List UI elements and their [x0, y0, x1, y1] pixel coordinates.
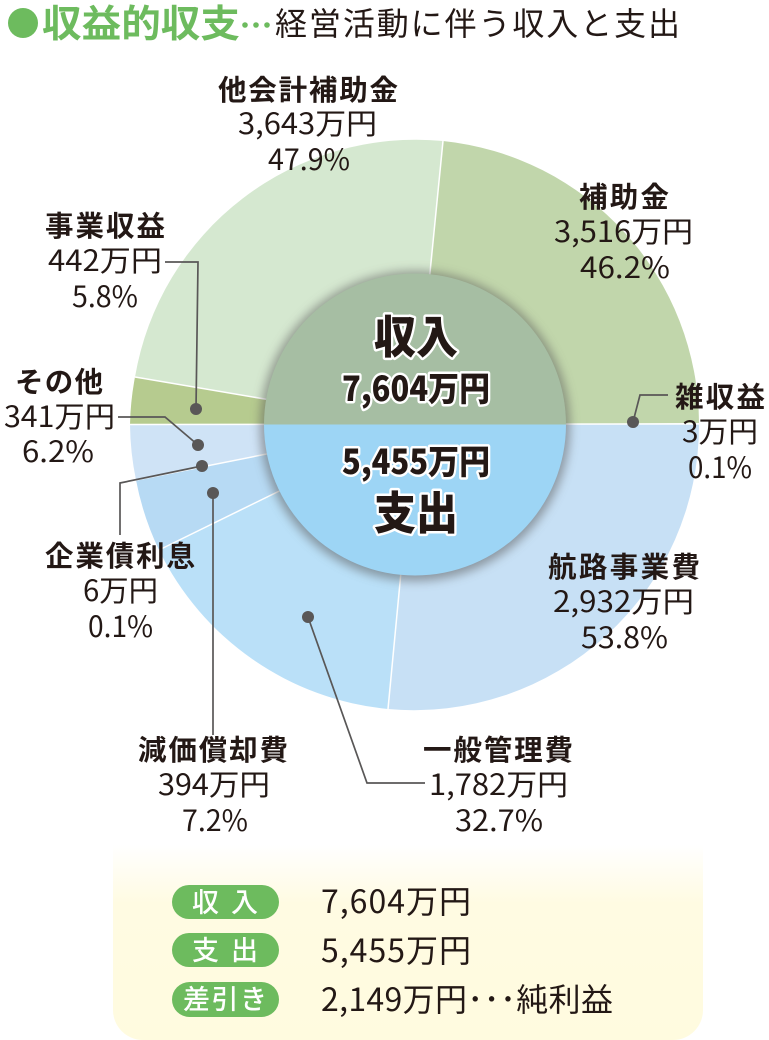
pill: 収入	[172, 881, 279, 920]
label: 一般管理費	[423, 728, 573, 840]
center label: expense	[342, 435, 490, 542]
label: 一般管理費: 32.7%	[455, 798, 543, 840]
slice: 一般管理費	[159, 424, 415, 709]
center circle: income half	[264, 274, 566, 424]
label: 事業収益: 事業収益	[45, 204, 165, 245]
label: 航路事業費: 2,932万円	[553, 579, 694, 621]
label: 補助金: 3,516万円	[554, 209, 693, 251]
label: 減価償却費	[138, 728, 288, 840]
slice: 補助金	[415, 141, 699, 424]
label: 雑収益: 雑収益	[675, 375, 765, 416]
summary panel	[113, 845, 703, 1040]
label: その他	[4, 360, 115, 471]
label: その他: 341万円	[4, 394, 115, 436]
label: 補助金: 補助金	[579, 175, 669, 216]
label: 航路事業費: 航路事業費	[548, 545, 700, 586]
donut chart: revenue and expenses	[130, 140, 699, 710]
label: 事業収益	[45, 204, 165, 316]
label: 事業収益: 442万円	[48, 238, 162, 280]
label: 航路事業費	[548, 545, 700, 657]
label: 一般管理費: 一般管理費	[423, 728, 573, 769]
label: 雑収益: 0.1%	[688, 445, 752, 487]
label: 補助金: 46.2%	[580, 245, 670, 287]
pill: 支出	[172, 929, 279, 968]
slice: その他	[130, 424, 415, 480]
label: 他会計補助金	[218, 68, 398, 179]
slice: 事業収益	[130, 377, 415, 424]
center circle: expense half	[264, 424, 566, 576]
center label: expense: 5,455万円	[342, 435, 490, 484]
label: 企業債利息	[45, 534, 195, 646]
value: 収入: 7,604万円	[321, 877, 471, 923]
leader lines and dots	[118, 262, 668, 783]
label: 雑収益: 3万円	[682, 409, 758, 451]
slice: 航路事業費	[388, 424, 699, 710]
center label: income: 収入	[374, 301, 458, 366]
title: 経営活動に伴う収入と支出	[275, 0, 680, 45]
center label: expense: 支出	[374, 477, 458, 542]
label: 一般管理費: 1,782万円	[429, 762, 568, 804]
label: 減価償却費: 減価償却費	[138, 728, 288, 769]
title	[8, 0, 680, 48]
label: 補助金	[554, 175, 693, 287]
pill: 差引き: 差引き	[183, 978, 267, 1017]
label: 企業債利息: 0.1%	[88, 604, 153, 646]
value: 支出: 5,455万円	[321, 926, 471, 972]
label: その他: 6.2%	[22, 429, 94, 471]
center label: income: 7,604万円	[342, 362, 490, 411]
label: 企業債利息: 企業債利息	[45, 534, 195, 575]
label: 他会計補助金: 47.9%	[268, 137, 350, 179]
label: 雑収益	[675, 375, 765, 487]
center label: income	[342, 301, 490, 411]
value: 差引き: 2,149万円･･･純利益	[321, 975, 613, 1021]
label: 他会計補助金: 他会計補助金	[218, 68, 398, 109]
label: 他会計補助金: 3,643万円	[238, 101, 377, 143]
pill: 収入: 収 入	[192, 881, 258, 920]
slice: 減価償却費	[136, 424, 415, 550]
label: 減価償却費: 7.2%	[182, 798, 248, 840]
label: 事業収益: 5.8%	[72, 274, 138, 316]
label: 航路事業費: 53.8%	[581, 615, 668, 657]
label: その他: その他	[15, 360, 103, 401]
pill: 支出: 支 出	[192, 929, 258, 968]
slice: 他会計補助金	[135, 140, 443, 424]
label: 減価償却費: 394万円	[158, 762, 270, 804]
label: 企業債利息: 6万円	[83, 568, 158, 610]
